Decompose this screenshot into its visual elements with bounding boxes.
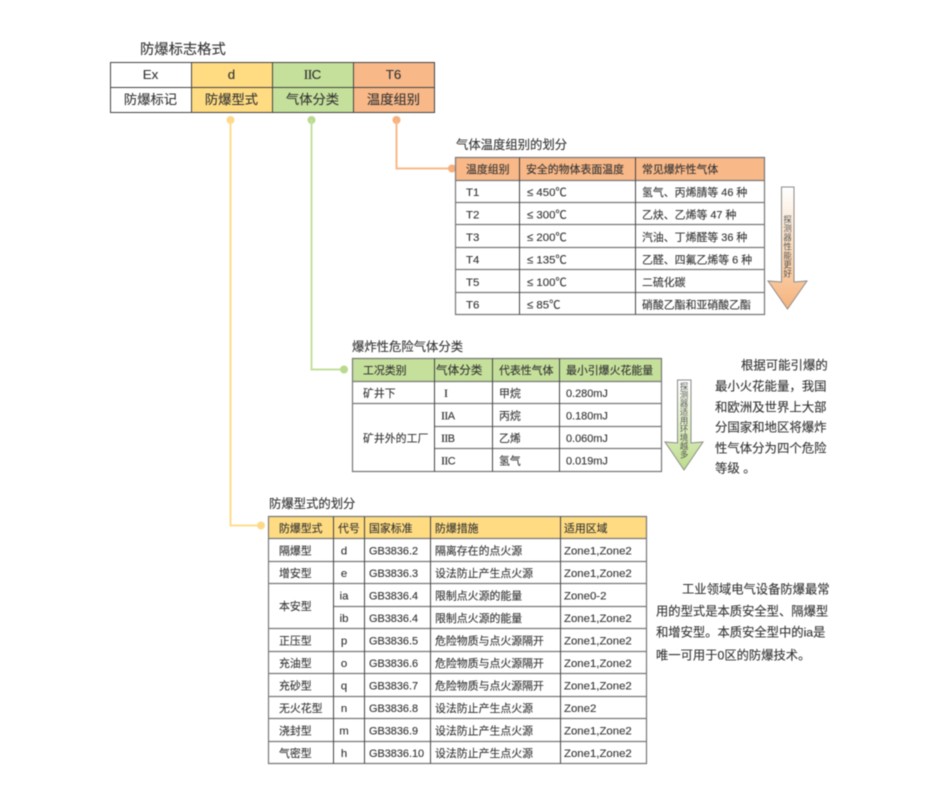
row d: d bbox=[341, 546, 347, 558]
arrow: detector performance: 好 bbox=[783, 268, 792, 278]
row class IIB bbox=[363, 431, 608, 445]
row n: Zone2 bbox=[564, 703, 596, 715]
row class IIC: IIC bbox=[441, 454, 456, 468]
row p: 正压型 bbox=[279, 634, 312, 648]
format row: names: 温度组别 bbox=[367, 92, 420, 107]
row T2: T2 bbox=[466, 210, 479, 222]
gas table header: 代表性气体 bbox=[499, 363, 554, 377]
row o: GB3836.6 bbox=[369, 658, 418, 670]
row n: n bbox=[341, 703, 347, 715]
row T3: ≤ 200℃ bbox=[527, 232, 567, 244]
row n bbox=[279, 701, 596, 715]
connector: green, gas class bbox=[308, 116, 348, 374]
arrow: detector performance: 探 bbox=[783, 214, 792, 224]
row ia: GB3836.4 bbox=[369, 590, 418, 602]
format row: names: 气体分类 bbox=[286, 92, 339, 107]
gas table header bbox=[363, 363, 653, 377]
row T2 bbox=[466, 208, 737, 222]
format row: names bbox=[124, 92, 420, 107]
type table header: 防爆措施 bbox=[435, 521, 479, 535]
temperature table header: 常见爆炸性气体 bbox=[642, 162, 718, 176]
row T3: T3 bbox=[466, 232, 479, 244]
row e: e bbox=[341, 568, 347, 580]
row h: Zone1,Zone2 bbox=[564, 748, 632, 760]
gas table header: 气体分类 bbox=[436, 363, 483, 377]
row q: GB3836.7 bbox=[369, 680, 418, 692]
type table header bbox=[279, 521, 608, 535]
row p: 危险物质与点火源隔开 bbox=[435, 634, 544, 648]
row m: m bbox=[339, 726, 349, 738]
row ib bbox=[279, 599, 632, 625]
row e: Zone1,Zone2 bbox=[564, 568, 632, 580]
row e: 设法防止产生点火源 bbox=[435, 566, 533, 580]
row ib: ib bbox=[340, 613, 348, 625]
text block: gas danger levels: 最小火花能量，我国 bbox=[715, 378, 827, 394]
arrow: detector performance bbox=[768, 187, 807, 309]
row class IIB: 乙烯 bbox=[499, 432, 521, 445]
text block: gas danger levels: 等级 。 bbox=[715, 460, 756, 476]
row class I: I bbox=[444, 386, 448, 400]
row class IIA: IIA bbox=[441, 408, 456, 422]
arrow: detector applicable environments: 探 bbox=[680, 382, 689, 392]
row m: Zone1,Zone2 bbox=[564, 726, 632, 738]
row m: GB3836.9 bbox=[369, 726, 418, 738]
row h: 气密型 bbox=[279, 746, 312, 760]
row d: Zone1,Zone2 bbox=[564, 546, 632, 558]
row q: q bbox=[341, 680, 347, 692]
row class IIA: 丙烷 bbox=[499, 408, 521, 422]
row p bbox=[279, 634, 632, 648]
row T6: 硝酸乙酯和亚硝酸乙酯 bbox=[642, 298, 751, 312]
row h: h bbox=[341, 748, 347, 760]
row class IIB: IIB bbox=[441, 431, 455, 445]
row ib: Zone1,Zone2 bbox=[564, 613, 632, 625]
row class IIA: 0.180mJ bbox=[566, 410, 608, 422]
text block: gas danger levels: 和欧洲及世界上大部 bbox=[715, 400, 827, 414]
format row: names: 防爆型式 bbox=[205, 92, 258, 107]
row o: 充油型 bbox=[279, 656, 312, 670]
row ib: 本安型 bbox=[279, 599, 312, 613]
type table header: 适用区域 bbox=[564, 522, 608, 535]
connector: yellow, explosion-proof type bbox=[226, 116, 265, 530]
text block: gas danger levels: 根据可能引爆的 bbox=[741, 358, 828, 372]
format row: codes bbox=[143, 67, 401, 82]
row q: 危险物质与点火源隔开 bbox=[435, 678, 544, 692]
arrow: detector performance: 更 bbox=[783, 260, 792, 270]
row p: Zone1,Zone2 bbox=[564, 636, 632, 648]
type table header: 防爆型式 bbox=[279, 521, 323, 535]
row ia: Zone0-2 bbox=[564, 590, 606, 602]
row T4: T4 bbox=[466, 254, 479, 266]
row T1: T1 bbox=[466, 187, 479, 199]
row class IIC: 氢气 bbox=[499, 454, 521, 468]
row ib: 限制点火源的能量 bbox=[435, 611, 522, 625]
row q: 充砂型 bbox=[279, 678, 312, 692]
row T3: 汽油、丁烯醛等 36 种 bbox=[642, 230, 747, 244]
row class IIA bbox=[441, 408, 608, 422]
format row: names: 防爆标记 bbox=[124, 92, 177, 107]
text block: common explosion-proof types: 和增安型。本质安全型中的ia是 bbox=[656, 624, 825, 640]
gas table header: 工况类别 bbox=[363, 363, 407, 377]
row T4 bbox=[466, 252, 752, 266]
heading: 防爆型式的划分: 防爆型式的划分 bbox=[269, 496, 355, 511]
format row: codes: IIC bbox=[304, 67, 322, 82]
row T2: 乙炔、乙烯等 47 种 bbox=[642, 208, 737, 222]
temperature table header: 温度组别 bbox=[466, 162, 510, 176]
connector: orange, temperature group bbox=[392, 116, 456, 172]
row d: 隔爆型 bbox=[279, 544, 312, 558]
arrow: detector applicable environments: 测 bbox=[680, 390, 688, 400]
row T4: ≤ 135℃ bbox=[527, 254, 567, 266]
heading: 防爆标志格式: 防爆标志格式 bbox=[140, 41, 226, 58]
type table header: 代号 bbox=[338, 522, 360, 535]
row T6 bbox=[466, 298, 751, 312]
text block: common explosion-proof types: 用的型式是本质安全型、隔爆型 bbox=[656, 604, 828, 618]
heading: 气体温度组别的划分: 气体温度组别的划分 bbox=[456, 137, 567, 152]
arrow: detector applicable environments: 适 bbox=[680, 407, 689, 417]
row class IIC: 0.019mJ bbox=[566, 456, 608, 468]
arrow: detector applicable environments: 境 bbox=[680, 432, 688, 442]
gas class table bbox=[352, 358, 662, 472]
row e: GB3836.3 bbox=[369, 568, 418, 580]
arrow: detector applicable environments: 多 bbox=[680, 450, 688, 460]
gas table header: 最小引爆火花能量 bbox=[566, 363, 653, 377]
temperature table header bbox=[466, 162, 718, 176]
row d bbox=[279, 544, 632, 558]
text block: common explosion-proof types: 唯一可用于0区的防爆技术。 bbox=[656, 648, 810, 662]
arrow: detector performance: 能 bbox=[783, 250, 792, 260]
row m: 设法防止产生点火源 bbox=[435, 724, 533, 738]
row T5: T5 bbox=[466, 277, 479, 289]
arrow: detector performance: 器 bbox=[783, 232, 792, 242]
arrow: detector applicable environments: 器 bbox=[680, 398, 689, 408]
format table bbox=[110, 62, 434, 112]
row T6: ≤ 85℃ bbox=[527, 300, 560, 312]
explosion-proof type table bbox=[268, 516, 646, 764]
row T5: ≤ 100℃ bbox=[527, 277, 567, 289]
row T6: T6 bbox=[466, 300, 479, 312]
row class I: 矿井下 bbox=[363, 386, 396, 400]
row class I bbox=[363, 386, 608, 400]
row m bbox=[279, 724, 632, 738]
row class I: 甲烷 bbox=[499, 386, 521, 400]
row T5: 二硫化碳 bbox=[642, 275, 686, 289]
row class I: 0.280mJ bbox=[566, 388, 608, 400]
row n: 无火花型 bbox=[279, 701, 323, 715]
row class IIB: 矿井外的工厂 bbox=[363, 431, 428, 445]
row ib: GB3836.4 bbox=[369, 613, 418, 625]
row p: GB3836.5 bbox=[369, 636, 418, 648]
row q: Zone1,Zone2 bbox=[564, 680, 632, 692]
row ia bbox=[340, 588, 606, 602]
temperature group table bbox=[455, 157, 764, 314]
row class IIC bbox=[441, 454, 608, 468]
row o: 危险物质与点火源隔开 bbox=[435, 656, 544, 670]
row ia: 限制点火源的能量 bbox=[435, 588, 522, 602]
row n: 设法防止产生点火源 bbox=[435, 701, 533, 715]
row p: p bbox=[341, 636, 347, 648]
row T5 bbox=[466, 275, 686, 289]
temperature table header: 安全的物体表面温度 bbox=[526, 162, 624, 176]
row e bbox=[279, 566, 632, 580]
text block: common explosion-proof types: 工业领域电气设备防爆最常 bbox=[682, 582, 830, 596]
row o bbox=[279, 656, 632, 670]
row class IIB: 0.060mJ bbox=[566, 433, 608, 445]
format row: codes: T6 bbox=[386, 67, 401, 82]
row d: GB3836.2 bbox=[369, 546, 418, 558]
row n: GB3836.8 bbox=[369, 703, 418, 715]
row d: 隔离存在的点火源 bbox=[435, 544, 522, 558]
row h bbox=[279, 746, 632, 760]
row T2: ≤ 300℃ bbox=[527, 210, 567, 222]
row T3 bbox=[466, 230, 747, 244]
text block: gas danger levels: 分国家和地区将爆炸 bbox=[715, 420, 827, 434]
arrow: detector applicable environments: 环 bbox=[680, 424, 688, 434]
row T1: ≤ 450℃ bbox=[527, 187, 567, 199]
row o: o bbox=[341, 658, 347, 670]
type table header: 国家标准 bbox=[369, 521, 413, 535]
arrow: detector performance: 性 bbox=[783, 242, 792, 252]
heading: 爆炸性危险气体分类: 爆炸性危险气体分类 bbox=[352, 339, 463, 354]
row T1: 氢气、丙烯腈等 46 种 bbox=[642, 185, 747, 199]
row T1 bbox=[466, 185, 747, 199]
row h: GB3836.10 bbox=[369, 748, 424, 760]
arrow: detector applicable environments: 越 bbox=[680, 441, 689, 451]
arrow: detector applicable environments: 用 bbox=[680, 416, 688, 426]
row ia: ia bbox=[340, 590, 349, 602]
arrow: detector applicable environments bbox=[665, 380, 703, 470]
row q bbox=[279, 678, 632, 692]
row o: Zone1,Zone2 bbox=[564, 658, 632, 670]
row e: 增安型 bbox=[279, 566, 312, 580]
format row: codes: Ex bbox=[143, 67, 159, 82]
arrow: detector performance: 测 bbox=[783, 224, 792, 234]
row T4: 乙醛、四氟乙烯等 6 种 bbox=[642, 252, 752, 266]
row m: 浇封型 bbox=[279, 724, 312, 738]
row h: 设法防止产生点火源 bbox=[435, 746, 533, 760]
format row: codes: d bbox=[228, 67, 235, 82]
text block: gas danger levels: 性气体分为四个危险 bbox=[715, 440, 827, 456]
